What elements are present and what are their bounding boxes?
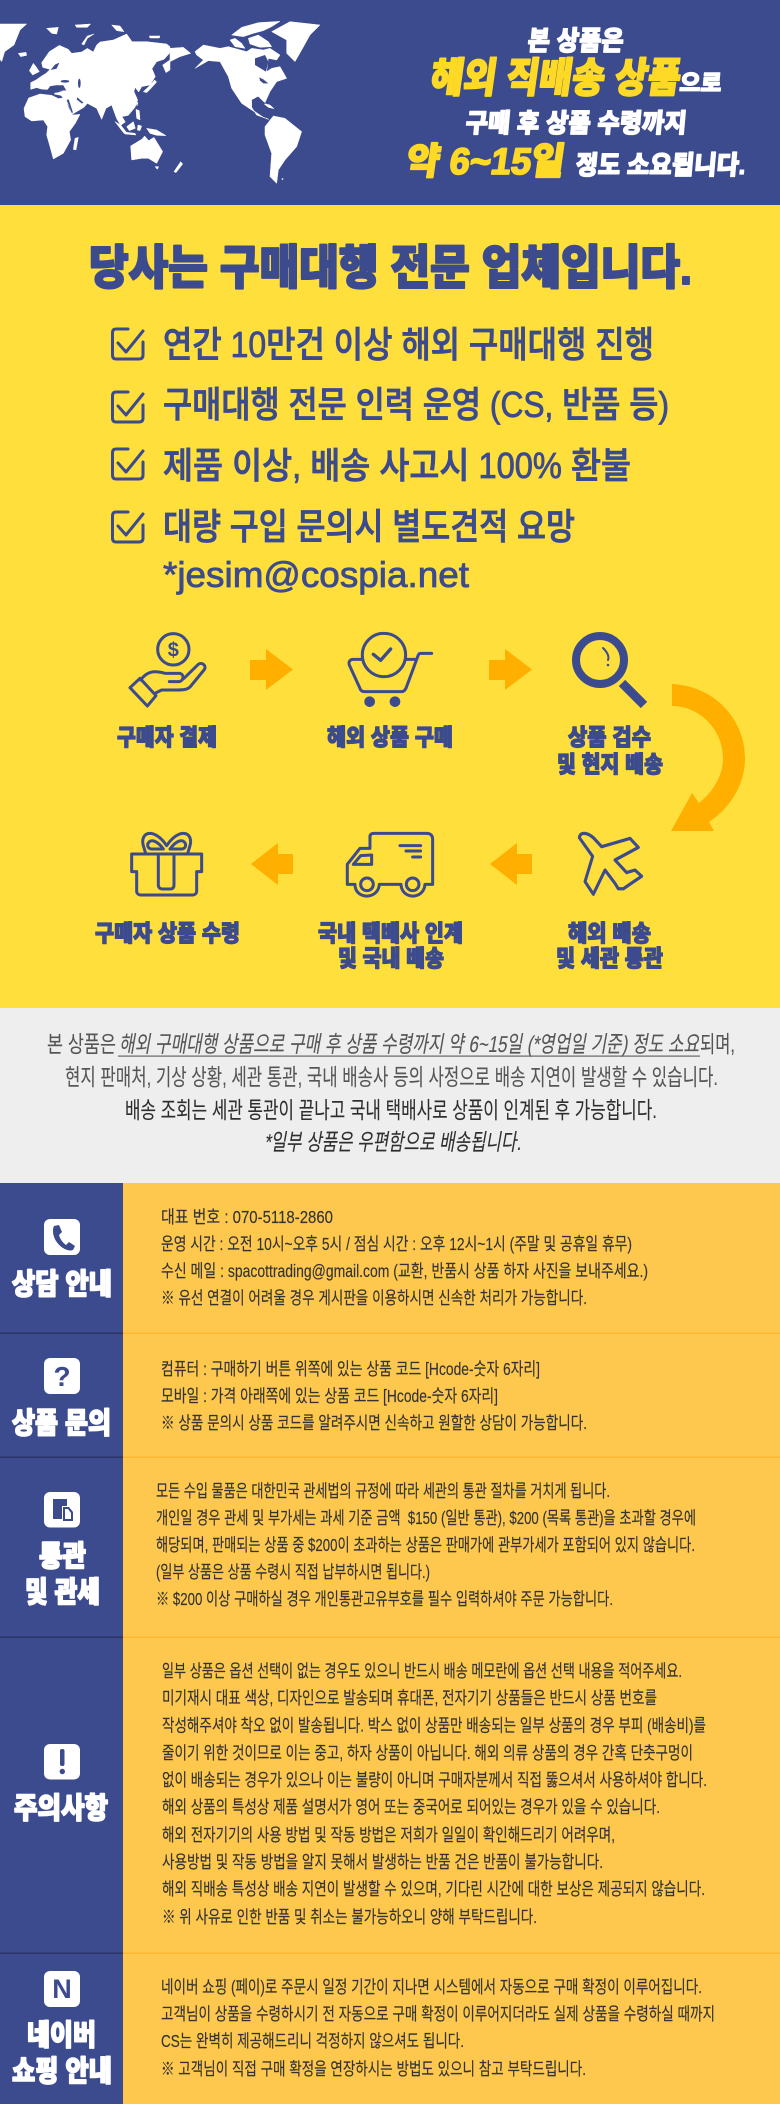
text: shipping notice line 4: *일부 상품은 우편함으로 배송됩니다. — [263, 1129, 525, 1155]
heading: delivery time: 약 6~15일 — [404, 140, 568, 182]
checklist item 4: 대량 구입 문의시 별도견적 요망 — [163, 506, 575, 547]
icon: airplane — [579, 833, 642, 894]
label: domestic courier handoff: 및 국내 배송 — [338, 945, 444, 971]
heading: until receipt: 구매 후 상품 수령까지 — [464, 108, 688, 138]
heading: naver shopping — [12, 2019, 112, 2088]
arrow: left 2 — [251, 843, 293, 885]
heading: overseas direct shipping: 으로 — [679, 70, 723, 96]
checklist item 3: 제품 이상, 배송 사고시 100% 환불 — [163, 445, 631, 486]
label: buyer payment: 구매자 결제 — [117, 724, 217, 750]
text: caution details: 사용방법 및 작동 방법을 알지 못해서 발생하는 반품 건은 반품이 불가능합니다. — [162, 1852, 603, 1872]
heading: overseas direct shipping: 해외 직배송 상품 — [428, 55, 684, 101]
icon: exclamation mark — [44, 1744, 80, 1780]
label: buyer receives product: 구매자 상품 수령 — [95, 920, 240, 946]
arrow: right 2 — [489, 649, 532, 690]
text: inquiry details: ※ 상품 문의시 상품 코드를 알려주시면 신속하고 원할한 상담이 가능합니다. — [161, 1413, 587, 1433]
text: inquiry details: 컴퓨터 : 구매하기 버튼 위쪽에 있는 상품 코드 [Hcode-숫자 6자리] — [161, 1359, 540, 1379]
heading: cautions: 주의사항 — [14, 1792, 108, 1825]
label: inspection and local shipping: 상품 검수 — [568, 724, 651, 750]
text: inquiry details: 모바일 : 가격 아래쪽에 있는 상품 코드 [Hcode-숫자 6자리] — [161, 1386, 498, 1406]
icon: letter N: N — [52, 1974, 72, 2004]
heading: naver shopping: 네이버 — [27, 2019, 96, 2052]
text: consultation details: 수신 메일 : spacottrading@gmail.com (교환, 반품시 상품 하자 사진을 보내주세요.) — [161, 1261, 648, 1281]
text: caution details: 해외 전자기기의 사용 방법 및 작동 방법은 저희가 일일이 확인해드리기 어려우며, — [162, 1825, 615, 1845]
panel: cautions — [0, 1638, 780, 1954]
heading: company title: 당사는 구매대행 전문 업체입니다. — [89, 241, 692, 294]
icon: hand with coin — [130, 634, 205, 706]
label: inspection and local shipping — [557, 724, 663, 777]
panel: product inquiry — [0, 1334, 780, 1458]
icon: magnifier — [576, 636, 644, 705]
heading: delivery time — [404, 140, 747, 182]
heading: customs — [25, 1540, 100, 1609]
label: domestic courier handoff — [318, 920, 463, 971]
text: caution details: ※ 위 사유로 인한 반품 및 취소는 불가능하오니 양해 부탁드립니다. — [162, 1907, 537, 1927]
heading: delivery time: 정도 소요됩니다. — [574, 150, 747, 180]
checklist item 1: 연간 10만건 이상 해외 구매대행 진행 — [163, 324, 654, 365]
text: shipping notice line 1: 본 상품은 — [47, 1031, 116, 1057]
text: consultation details: 운영 시간 : 오전 10시~오후 5시 / 점심 시간 : 오후 12시~1시 (주말 및 공휴일 휴무) — [161, 1234, 632, 1254]
text: customs details — [156, 1481, 696, 1609]
text: naver shopping details — [161, 1977, 715, 2079]
text: consultation details — [161, 1207, 648, 1308]
panel: consultation — [0, 1183, 780, 1334]
panel: shipping notice — [0, 1008, 780, 1183]
icon: document — [44, 1492, 80, 1528]
world map — [0, 21, 320, 183]
text: customs details: (일부 상품은 상품 수령시 직접 납부하시면 됩니다.) — [156, 1562, 430, 1582]
heading: customs: 및 관세 — [25, 1576, 100, 1609]
checklist item 4: *jesim@cospia.net — [163, 554, 469, 595]
panel: naver shopping — [0, 1954, 780, 2104]
label: inspection and local shipping: 및 현지 배송 — [557, 751, 663, 777]
heading: product notice line 1: 본 상품은 — [526, 26, 625, 56]
checklist item 2: 구매대행 전문 인력 운영 (CS, 반품 등) — [163, 384, 669, 425]
text: naver shopping details: ※ 고객님이 직접 구매 확정을 연장하시는 방법도 있으니 참고 부탁드립니다. — [161, 2059, 586, 2079]
text: customs details: ※ $200 이상 구매하실 경우 개인통관고유부호를 필수 입력하셔야 주문 가능합니다. — [156, 1589, 613, 1609]
heading: product inquiry: 상품 문의 — [12, 1407, 111, 1440]
arrow: curved down — [671, 684, 745, 831]
panel: company introduction and process — [0, 205, 780, 1008]
text: customs details: 모든 수입 물품은 대한민국 관세법의 규정에 따라 세관의 통관 절차를 거치게 됩니다. — [156, 1481, 610, 1501]
text: caution details — [162, 1661, 707, 1927]
icon: delivery truck — [347, 833, 433, 896]
label: overseas purchase: 해외 상품 구매 — [327, 724, 453, 750]
checklist item 4 — [112, 506, 575, 595]
text: naver shopping details: CS는 완벽히 제공해드리니 걱정하지 않으셔도 됩니다. — [161, 2031, 464, 2051]
heading: naver shopping: 쇼핑 안내 — [12, 2055, 112, 2088]
icon: phone — [44, 1219, 80, 1255]
arrow: right 1 — [250, 649, 293, 690]
text: shipping notice line 1: 되며, — [700, 1031, 735, 1057]
label: overseas shipping and customs: 및 세관 통관 — [556, 945, 663, 971]
text: consultation details: ※ 유선 연결이 어려울 경우 게시판을 이용하시면 신속한 처리가 가능합니다. — [161, 1288, 587, 1308]
label: overseas shipping and customs: 해외 배송 — [568, 920, 651, 946]
icon: question mark: ? — [53, 1361, 71, 1392]
icon: hand with coin: $ — [168, 640, 179, 662]
panel: header banner — [0, 0, 780, 205]
label: overseas shipping and customs — [556, 920, 663, 971]
heading: consultation: 상담 안내 — [12, 1268, 112, 1301]
panel: customs — [0, 1458, 780, 1638]
heading: customs: 통관 — [39, 1540, 86, 1573]
label: domestic courier handoff: 국내 택배사 인계 — [318, 920, 463, 946]
icon: letter N — [44, 1971, 80, 2007]
icon: gift box — [132, 833, 202, 895]
text: consultation details: 대표 번호 : 070-5118-2860 — [161, 1207, 333, 1227]
icon: question mark — [44, 1358, 80, 1394]
arrow: left 1 — [490, 843, 532, 885]
text: inquiry details — [161, 1359, 587, 1433]
icon: shopping cart with check — [349, 633, 432, 707]
